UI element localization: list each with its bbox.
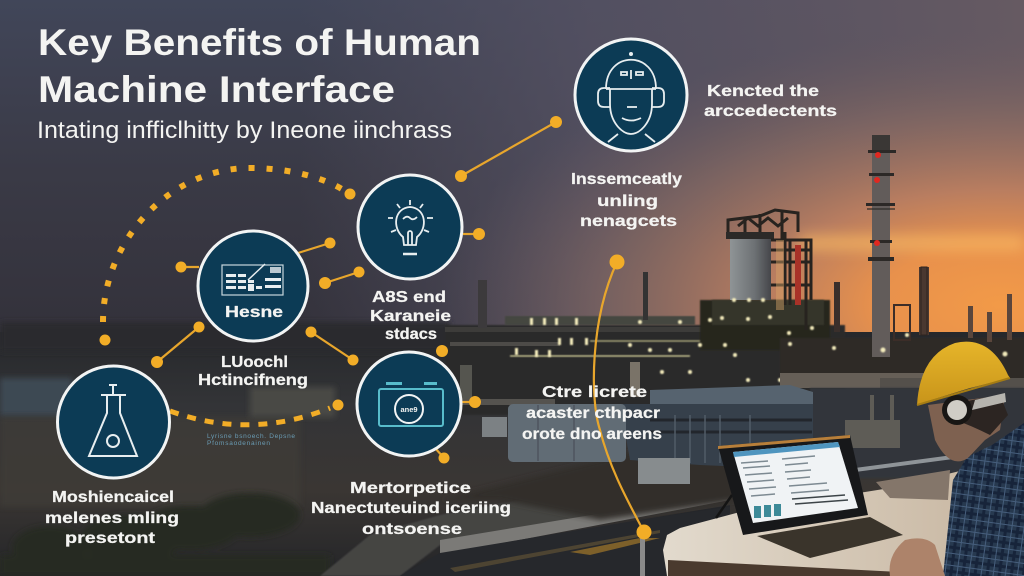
storage building and tanks bbox=[482, 385, 1024, 484]
icon: control panel with label: Hesne bbox=[225, 304, 283, 321]
label: flask benefit: Moshiencaicel bbox=[52, 489, 174, 506]
label: head benefit: Kencted the bbox=[707, 83, 819, 100]
label: below head: unling bbox=[597, 193, 658, 210]
label: center benefit bbox=[522, 384, 662, 443]
refinery plant bbox=[445, 135, 1024, 415]
title: Machine Interface bbox=[38, 69, 395, 110]
worker with hard hat bbox=[890, 342, 1024, 576]
icon: head with headset bbox=[575, 39, 687, 151]
label: bulb benefit: stdacs bbox=[385, 326, 437, 343]
label: flask benefit: presetont bbox=[65, 530, 156, 547]
icon: light bulb bbox=[358, 175, 462, 279]
label: center benefit: acaster cthpacr bbox=[526, 405, 660, 422]
title bbox=[38, 22, 481, 110]
icon: battery gauge: ane9 bbox=[400, 405, 418, 414]
subtitle: Intating infficlhitty by Ineone iinchrass bbox=[37, 117, 452, 144]
dotted arc connector bbox=[100, 168, 356, 346]
label: bulb benefit: Karaneie bbox=[370, 308, 451, 325]
label: head benefit bbox=[704, 83, 837, 120]
connector lines and nodes bbox=[151, 116, 652, 540]
icon: battery gauge bbox=[357, 352, 461, 456]
icon: laboratory flask bbox=[58, 366, 170, 478]
desk bbox=[663, 465, 1024, 576]
label: battery benefit: Mertorpetice bbox=[350, 480, 471, 497]
small caption bbox=[207, 433, 295, 447]
title: Key Benefits of Human bbox=[38, 22, 481, 63]
railing bbox=[855, 455, 968, 470]
dashed arc connector bbox=[170, 400, 344, 425]
label: flask benefit bbox=[45, 489, 179, 547]
pipeline bbox=[780, 373, 930, 388]
tablet with HMI screen bbox=[716, 435, 903, 558]
label: head benefit: arccedectents bbox=[704, 103, 837, 120]
tall chimney with red lights bbox=[866, 135, 896, 357]
icon: control panel with label bbox=[198, 231, 308, 341]
label: battery benefit bbox=[311, 480, 511, 538]
label: below head: Inssemceatly bbox=[571, 171, 682, 188]
label: center benefit: Ctre licrete bbox=[542, 384, 647, 401]
label: center benefit: orote dno areens bbox=[522, 426, 662, 443]
label: below head bbox=[571, 171, 682, 230]
label: battery benefit: ontsoense bbox=[362, 521, 462, 538]
small caption: Lyrisne bsnoech. Depsne bbox=[207, 433, 295, 440]
label: flask benefit: melenes mling bbox=[45, 510, 179, 527]
label: below head: nenagcets bbox=[580, 213, 677, 230]
label: panel benefit bbox=[198, 354, 308, 389]
plant lights bbox=[515, 298, 1008, 382]
label: battery benefit: Nanectuteuind iceriing bbox=[311, 500, 511, 517]
label: panel benefit: LUoochl bbox=[221, 354, 288, 371]
label: bulb benefit: A8S end bbox=[372, 289, 446, 306]
label: panel benefit: Hctincifneng bbox=[198, 372, 308, 389]
small caption: Pfomsaodenainen bbox=[207, 440, 270, 447]
label: bulb benefit bbox=[370, 289, 451, 343]
